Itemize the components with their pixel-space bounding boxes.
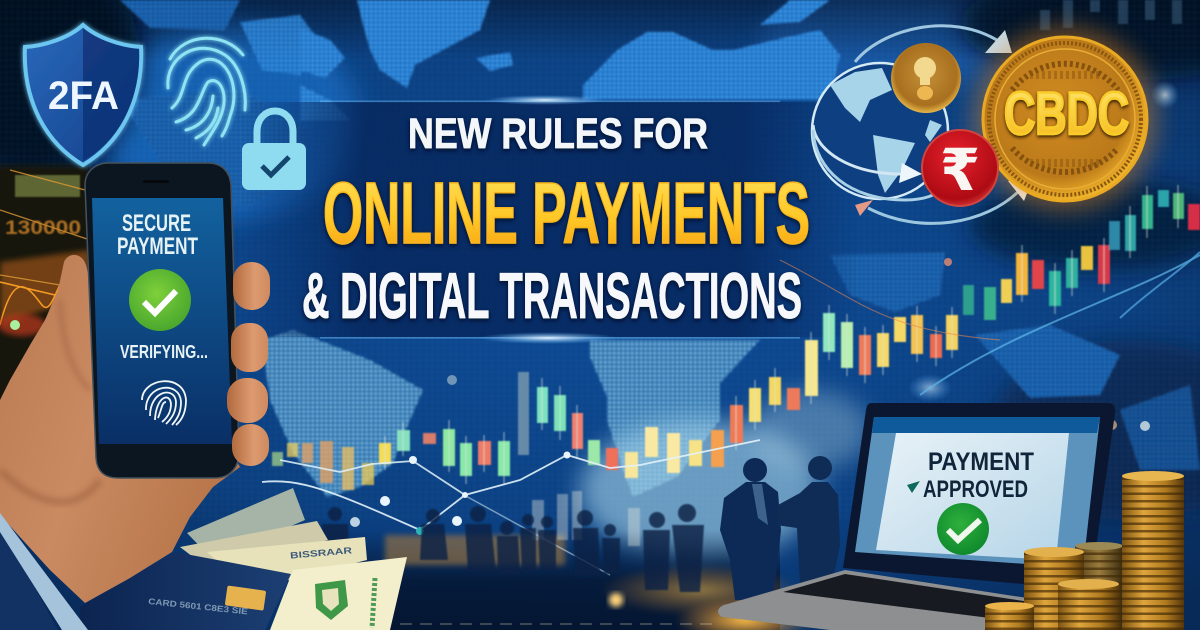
cuff — [0, 513, 88, 630]
CBDC gold coin — [973, 27, 1157, 211]
businessmen silhouettes — [720, 456, 840, 600]
title line 1: NEW RULES FOR — [408, 110, 708, 158]
right businessman — [776, 456, 840, 585]
flow arrows — [813, 26, 1020, 223]
laptop lid — [843, 403, 1115, 590]
payment approved text: APPROVED — [923, 476, 1028, 503]
tall coin stack — [1122, 471, 1184, 630]
blurred market numbers: 130000 — [5, 218, 81, 239]
icon: padlock with check — [242, 111, 306, 190]
sleeve — [0, 525, 58, 630]
screen — [92, 198, 232, 444]
smartphone — [85, 163, 239, 478]
front coin stack — [1058, 579, 1119, 630]
note crest — [315, 580, 348, 620]
approved check badge — [937, 503, 989, 555]
globe with payment flows — [812, 26, 1033, 223]
title backdrop band — [240, 102, 860, 337]
green check badge — [129, 269, 191, 331]
left businessman — [720, 458, 781, 600]
left orange market panel — [0, 165, 90, 405]
trend line with data points — [262, 252, 1200, 535]
globe — [812, 63, 948, 199]
back coin stack — [1075, 542, 1123, 630]
pale background bars — [532, 491, 640, 546]
laptop base — [718, 570, 1040, 630]
phone fingerprint — [142, 381, 186, 425]
candlestick chart — [272, 185, 1200, 490]
main title — [302, 110, 810, 332]
faded top-right candles — [1040, 0, 1182, 30]
laptop screen — [855, 417, 1100, 568]
serial text: BISSRAAR — [290, 545, 353, 561]
keyboard — [783, 574, 1030, 618]
bank card — [80, 552, 291, 630]
small coin stack — [985, 602, 1034, 630]
icon: neon fingerprint — [168, 38, 245, 145]
2FA label: 2FA — [48, 74, 119, 118]
silhouettes of distant people — [320, 504, 704, 592]
rupee glyph: ₹ — [940, 136, 980, 204]
CBDC label: CBDC — [1004, 80, 1129, 147]
secure payment label — [117, 210, 198, 260]
secure payment label: SECURE — [122, 210, 191, 237]
payment approved text — [907, 448, 1034, 503]
secure payment label: PAYMENT — [117, 233, 198, 260]
2FA shield — [25, 25, 141, 165]
gold coin with bulb icon — [891, 43, 961, 113]
gold coin stacks — [985, 471, 1184, 630]
title line 3: & DIGITAL TRANSACTIONS — [302, 259, 802, 332]
light streaks — [320, 81, 1179, 402]
rupee coin — [922, 130, 998, 206]
payment approved text: PAYMENT — [928, 448, 1034, 476]
continents — [830, 68, 942, 193]
laptop — [718, 403, 1115, 630]
title line 2: ONLINE PAYMENTS — [323, 165, 810, 262]
palm — [0, 255, 240, 603]
hand holding phone — [0, 255, 240, 630]
banknotes — [180, 488, 407, 630]
fingers gripping phone — [227, 262, 270, 466]
middle coin stack — [1024, 547, 1084, 630]
verifying label: VERIFYING... — [120, 342, 208, 362]
bank card: CARD 5601 C8E3 SIE — [148, 596, 249, 616]
lower scene lights — [300, 390, 870, 630]
